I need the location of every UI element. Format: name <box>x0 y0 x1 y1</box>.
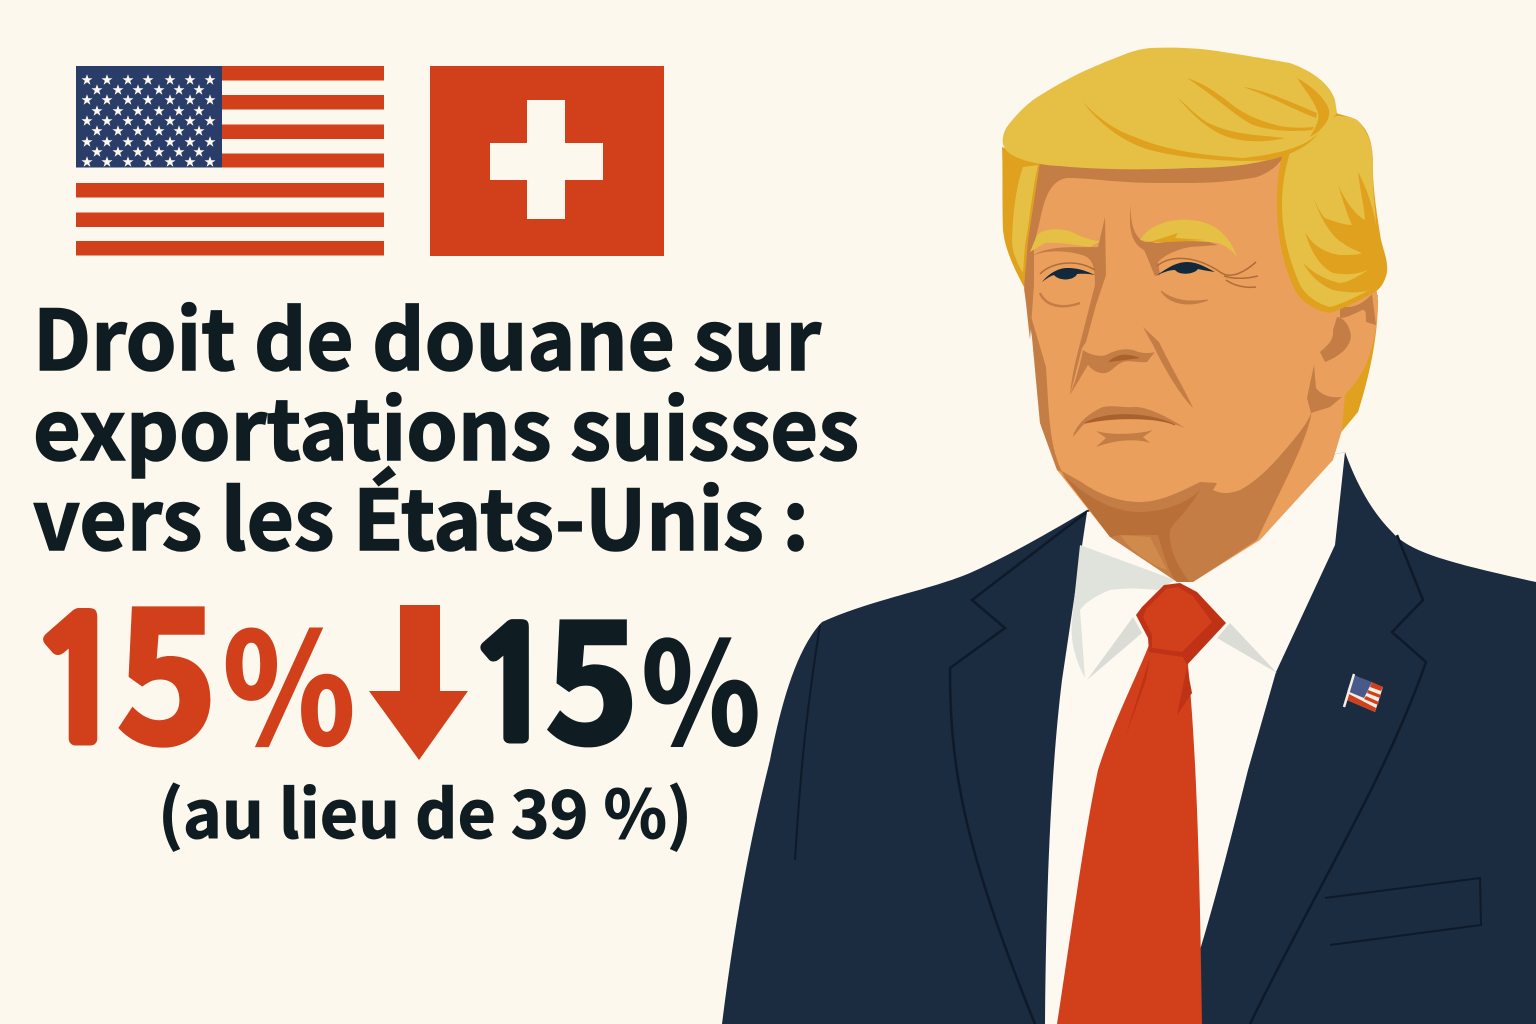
new rate: 15% in black: 5 <box>543 544 641 795</box>
right eyebrow <box>1140 220 1237 257</box>
new rate: 15% in black: 1 <box>464 610 561 762</box>
new rate: 15% in black <box>464 544 761 795</box>
right brow shadow <box>1130 205 1218 276</box>
right eye <box>1157 258 1258 304</box>
hair behind ear <box>1338 300 1378 436</box>
old rate: 15% in red: 1 <box>25 600 133 766</box>
jacket <box>722 452 1536 1024</box>
left brow shadow and nose line <box>1032 217 1106 395</box>
front hair <box>1003 48 1337 169</box>
shirt <box>1045 452 1345 1024</box>
note: instead of 39%: (au lieu de 39 %) <box>158 762 692 858</box>
old rate: 15% in red: % <box>222 565 356 790</box>
icon: Swiss flag <box>430 66 664 256</box>
old rate: 15% in red: 5 <box>114 524 220 801</box>
neck and jaw shadow <box>1060 410 1312 582</box>
arrow: down <box>369 605 468 760</box>
heading: exportations suisses <box>33 364 859 484</box>
side hair <box>1277 113 1387 313</box>
face <box>1024 153 1378 582</box>
heading <box>33 274 859 574</box>
icon: US flag <box>76 66 384 256</box>
old rate: 15% in red <box>25 524 356 801</box>
heading: vers les États-Unis : <box>33 454 809 574</box>
mouth <box>1073 406 1185 447</box>
forehead shadow <box>1024 153 1285 340</box>
nose <box>1070 327 1193 408</box>
heading: Droit de douane sur <box>33 274 822 394</box>
left eyebrow <box>1030 229 1100 252</box>
side of face shadow <box>1027 303 1062 472</box>
tie <box>1057 583 1226 1024</box>
left eye <box>1040 263 1095 306</box>
illustration: man in suit <box>722 48 1536 1024</box>
new rate: 15% in black: % <box>641 580 761 786</box>
icon: lapel flag pin <box>1344 674 1383 712</box>
left hair <box>1002 147 1040 287</box>
ear <box>1314 285 1378 397</box>
